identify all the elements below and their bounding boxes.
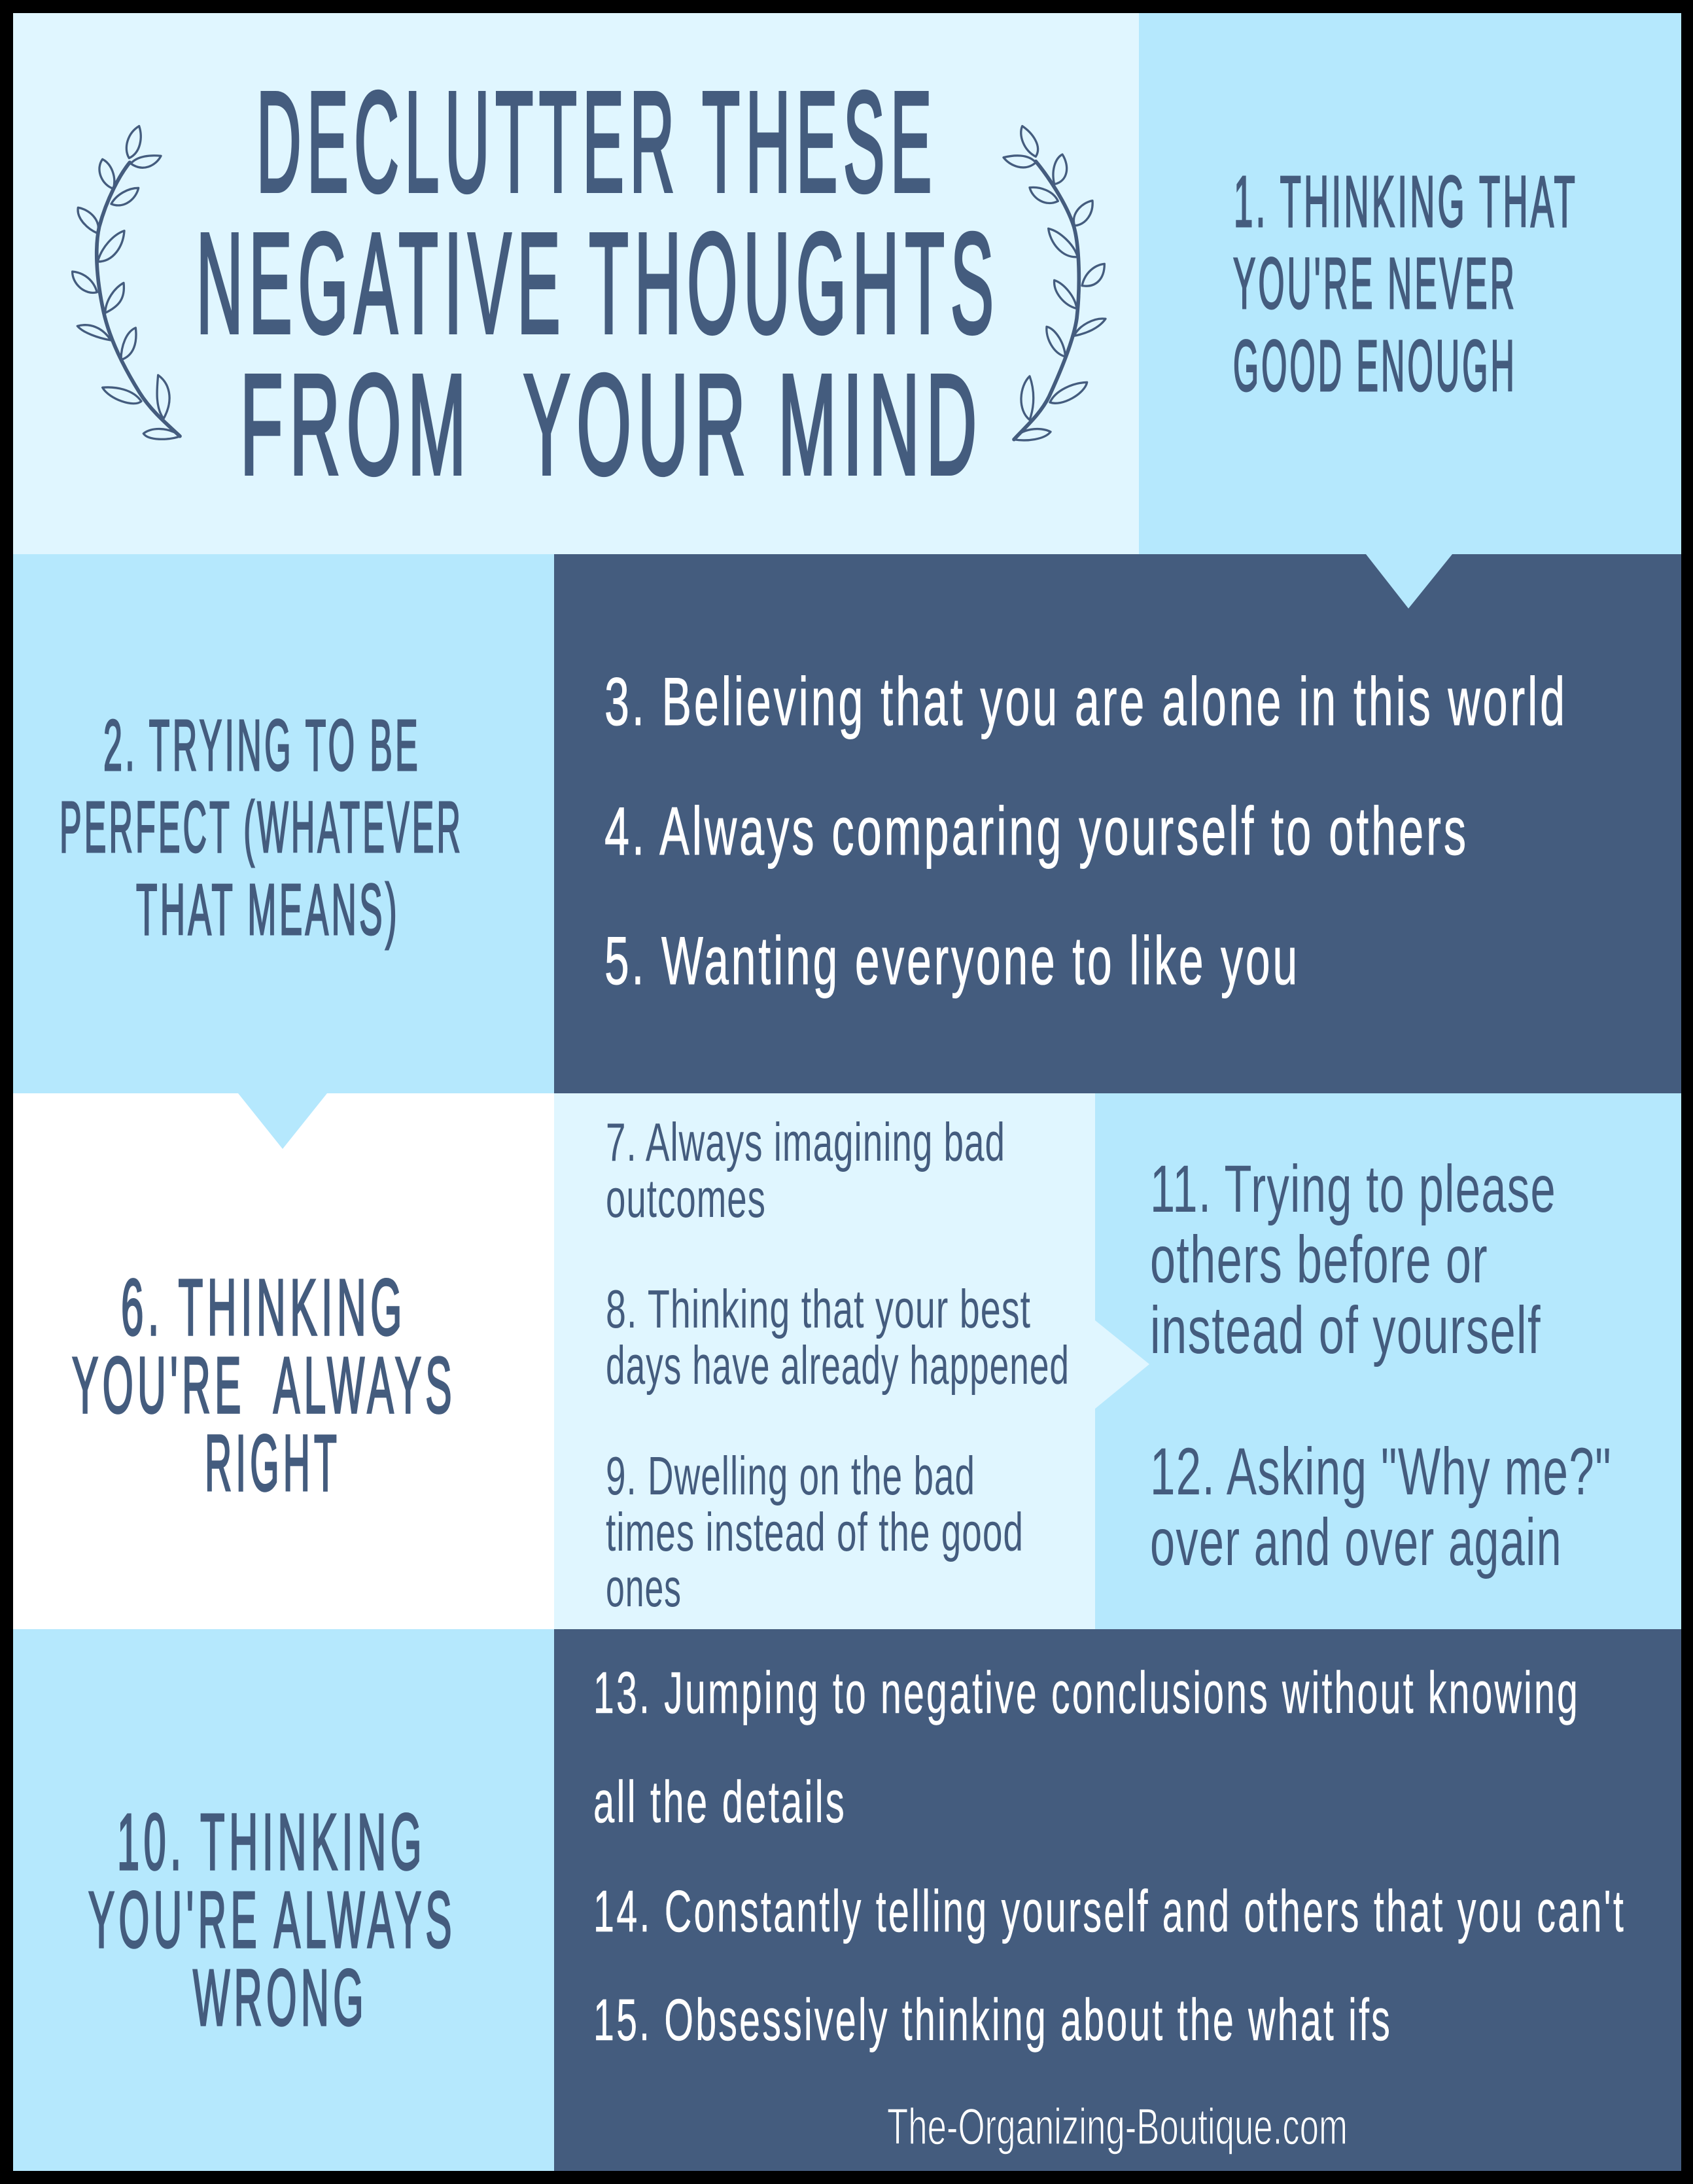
item 9 [606,1445,1024,1618]
panel: item 2: PERFECT (WHATEVER [60,787,463,868]
panel: title background [13,13,1139,554]
item 10 text: WRONG [193,1953,368,2042]
item 2 text: THAT MEANS) [136,870,400,950]
item 9: ones [606,1557,682,1618]
panel: items 13 to 15 [554,1629,1681,2171]
item 2 text: 2. TRYING TO BE [103,705,421,786]
item 10 text: 10. THINKING [117,1797,426,1886]
icon: right laurel branch [1004,126,1106,440]
item 6 text: RIGHT [205,1418,341,1507]
item 13 [593,1661,1580,1835]
item 8 [606,1278,1070,1396]
item 9: times instead of the good [606,1502,1024,1562]
panel: item 1 [1139,13,1681,608]
item 8: days have already happened [606,1335,1070,1396]
item 5: 5. Wanting everyone to like you [604,923,1300,999]
item 8: 8. Thinking that your best [606,1278,1031,1339]
item 12 [1150,1434,1612,1579]
panel: item 2 [13,554,554,1149]
item 1 text [1233,162,1578,406]
panel: items 3 to 5 [554,554,1681,1093]
item 6 text [72,1263,456,1507]
item 11: others before or [1150,1222,1488,1297]
item 9: 9. Dwelling on the bad [606,1445,975,1506]
panel: items 11 and 12 [1095,1093,1681,1629]
item 7 [606,1112,1005,1229]
website credit: The-Organizing-Boutique.com [887,2098,1348,2155]
panel: item 10: YOU'RE ALWAYS [88,1875,456,1964]
item 13: all the details [593,1770,846,1835]
item 7: outcomes [606,1168,766,1229]
item 7: 7. Always imagining bad [606,1112,1005,1172]
panel: item 6: YOU'RE ALWAYS [72,1341,456,1430]
panel: items 7 to 9 [554,1093,1149,1629]
title [196,63,1000,504]
item 2 text [60,705,463,950]
icon: left laurel branch [73,126,181,439]
item 10 text [88,1797,456,2042]
item 11 [1150,1152,1556,1367]
panel: item 10 [13,1629,554,2171]
item 6 text: 6. THINKING [121,1263,406,1352]
panel: item 6 [13,1093,554,1629]
